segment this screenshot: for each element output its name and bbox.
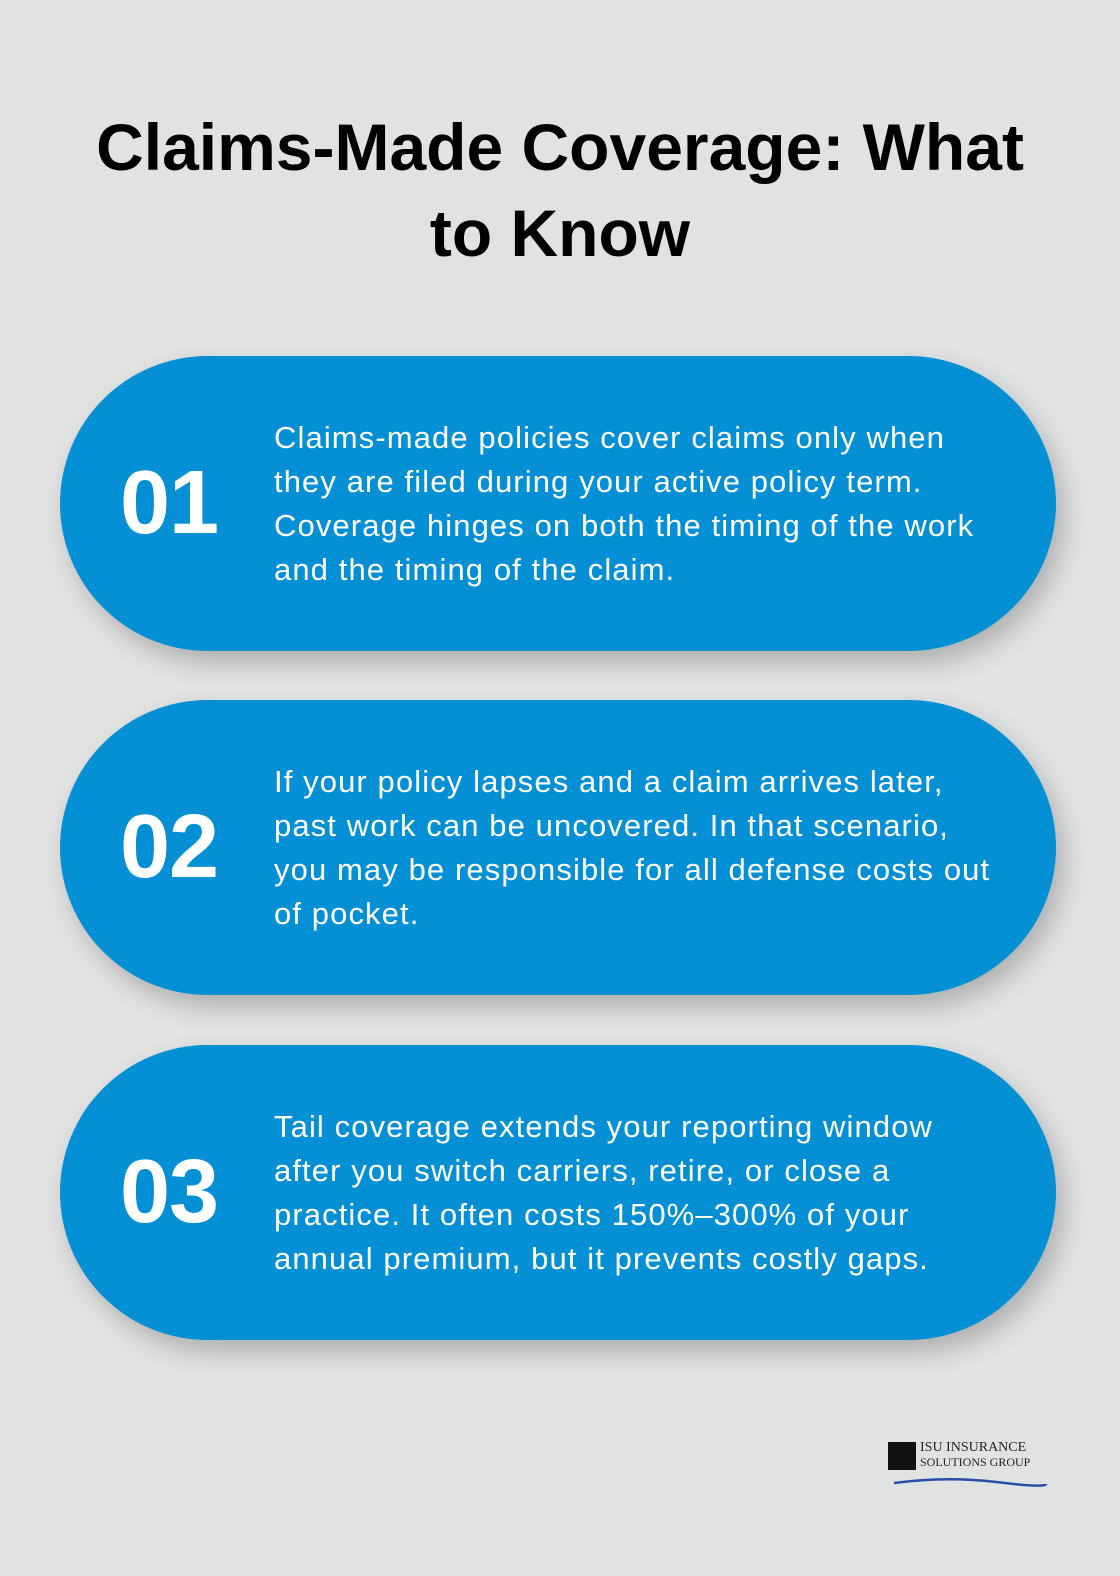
text 03: annual premium, but it prevents costly gaps. xyxy=(274,1240,929,1276)
title xyxy=(96,110,1024,270)
logo mark xyxy=(888,1442,916,1470)
logo xyxy=(888,1440,1048,1487)
text 02: If your policy lapses and a claim arrives later, xyxy=(274,764,944,798)
text 02: past work can be uncovered. In that scenario, xyxy=(274,808,949,842)
title: Claims-Made Coverage: What xyxy=(96,110,1024,184)
text 02: you may be responsible for all defense costs out xyxy=(274,852,990,886)
logo text xyxy=(920,1440,1030,1469)
text 02: of pocket. xyxy=(274,896,419,930)
text 01: they are filed during your active policy term. xyxy=(274,464,922,498)
number 02: 02 xyxy=(120,797,218,897)
text 03 xyxy=(274,1108,933,1276)
logo text: ISU INSURANCE xyxy=(920,1440,1026,1455)
text 03: after you switch carriers, retire, or close a xyxy=(274,1152,890,1188)
text 03: Tail coverage extends your reporting window xyxy=(274,1108,933,1144)
number 03: 03 xyxy=(120,1142,218,1242)
number 01: 01 xyxy=(120,453,218,553)
text 01 xyxy=(274,420,974,586)
text 03: practice. It often costs 150%–300% of your xyxy=(274,1196,910,1232)
text 01: and the timing of the claim. xyxy=(274,552,675,586)
logo text: SOLUTIONS GROUP xyxy=(920,1455,1030,1469)
card 01 xyxy=(60,356,1056,651)
text 02 xyxy=(274,764,990,930)
logo swoosh xyxy=(894,1478,1048,1487)
text 01: Claims-made policies cover claims only when xyxy=(274,420,945,454)
card 02 xyxy=(60,700,1056,995)
text 01: Coverage hinges on both the timing of the work xyxy=(274,508,974,542)
title: to Know xyxy=(430,196,690,270)
card 03 xyxy=(60,1045,1056,1340)
